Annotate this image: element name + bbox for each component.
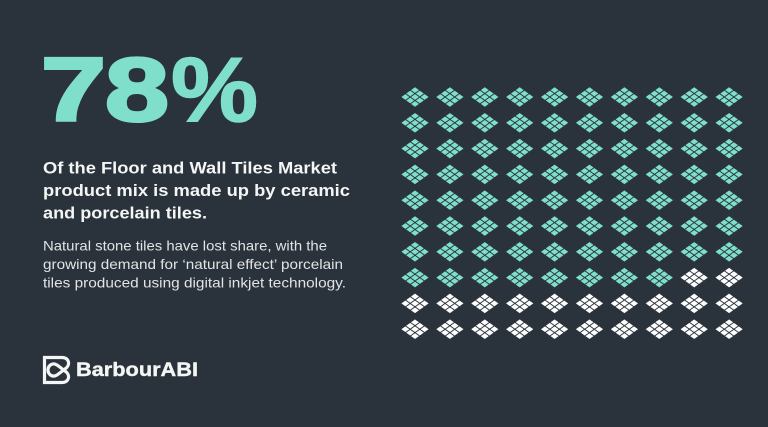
body text — [43, 238, 346, 290]
headline statistic: 78% — [41, 40, 258, 142]
headline statistic: 78%: 8 — [105, 40, 169, 140]
white tiles (22) — [402, 268, 742, 339]
heading text: product mix is made up by ceramic — [43, 181, 350, 200]
logo wordmark: BarbourABI — [76, 359, 198, 381]
body text: Natural stone tiles have lost share, with the — [43, 238, 327, 254]
logo icon — [44, 358, 69, 382]
heading text: and porcelain tiles. — [43, 204, 207, 222]
teal tiles (78) — [402, 87, 742, 287]
body text: tiles produced using digital inkjet technology. — [43, 274, 346, 290]
heading text — [43, 158, 350, 222]
body text: growing demand for ‘natural effect’ porcelain — [43, 256, 343, 272]
tile grid: 78 of 100 teal — [402, 87, 742, 339]
logo: BarbourABI — [44, 358, 198, 382]
headline statistic: 78%: 7 — [41, 40, 106, 140]
heading text: Of the Floor and Wall Tiles Market — [43, 158, 337, 178]
headline statistic: 78%: % — [171, 40, 258, 142]
